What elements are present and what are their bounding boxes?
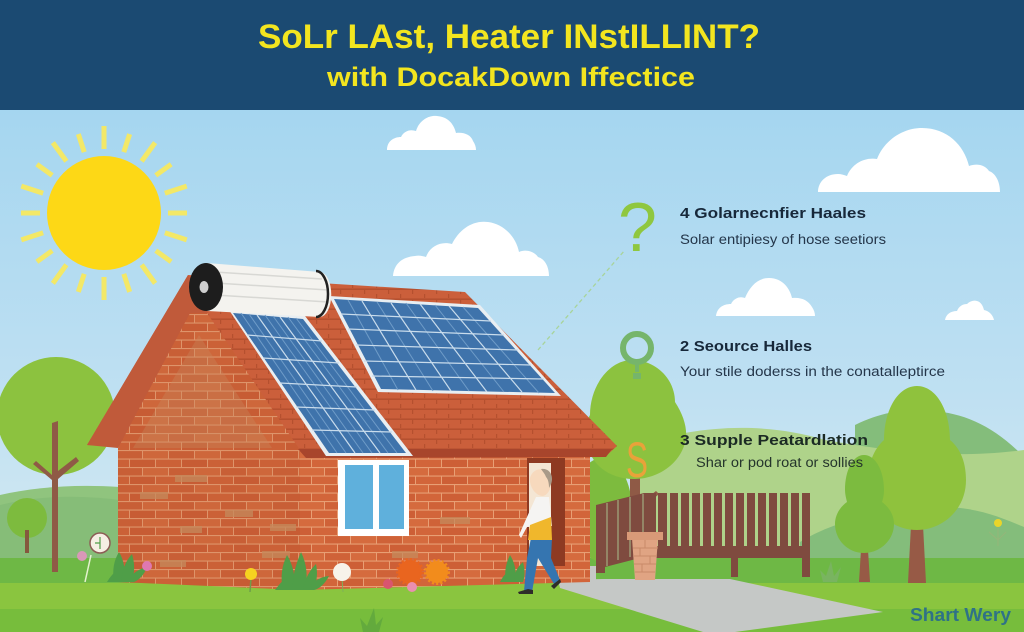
bush left (107, 552, 147, 582)
grass tuft right (820, 561, 841, 582)
flower amber (426, 561, 448, 583)
bush centre (275, 552, 329, 590)
flower far right (989, 519, 1006, 546)
icon: ring pin (623, 334, 651, 379)
tree: far left (7, 498, 47, 553)
brick wall (118, 313, 590, 590)
description: Shar or pod roat or sollies (696, 455, 863, 470)
legs (524, 538, 560, 592)
chimney pot planter (627, 532, 663, 580)
flower clock (77, 533, 110, 582)
description: Your stile doderss in the conatalleptirce (680, 364, 945, 379)
heading: 2 Seource Halles (680, 338, 812, 355)
flower orange (398, 560, 422, 584)
clouds (387, 116, 1000, 320)
header banner (0, 0, 1024, 110)
house (87, 263, 617, 590)
walkway (553, 566, 883, 632)
shirt (519, 497, 552, 538)
tree: centre behind text (572, 360, 686, 562)
solar water tank (189, 263, 331, 317)
tree: right large (868, 386, 966, 583)
main roof (87, 275, 617, 456)
person walking (518, 469, 561, 594)
door (527, 458, 565, 566)
left gable barge board (87, 275, 208, 448)
info item 3 (680, 432, 868, 470)
icon: sun (21, 126, 187, 300)
icon: dollar-like S: S (626, 432, 648, 488)
ground (0, 558, 1024, 632)
solar panel: right (329, 296, 561, 396)
hair (541, 469, 552, 488)
flower pink (142, 561, 417, 592)
brand label: Shart Wery (910, 605, 1011, 625)
heading: 3 Supple Peatardlation (680, 432, 868, 449)
flower yellow (245, 568, 257, 592)
roof eave (298, 449, 612, 458)
tree: left (0, 357, 115, 572)
dashed connector line (538, 250, 625, 350)
icon: question mark: ? (618, 188, 657, 266)
head (530, 469, 551, 496)
bush by door (500, 555, 524, 582)
info item 2 (680, 338, 945, 379)
grass tuft front (360, 608, 383, 632)
title: SoLr LAst, Heater INstILLINT? (258, 18, 760, 56)
tree: right small (835, 455, 894, 582)
shoes (518, 579, 561, 594)
apron (528, 517, 552, 540)
fence (596, 493, 810, 577)
bushes and flowers (77, 519, 1006, 632)
hills (0, 410, 1024, 567)
flower white (333, 563, 351, 592)
solar panel: left (229, 310, 413, 456)
info item 4 (680, 205, 886, 247)
heading: 4 Golarnecnfier Haales (680, 205, 866, 222)
subtitle: with DocakDown Iffectice (326, 62, 695, 92)
description: Solar entipiesy of hose seetiors (680, 232, 886, 247)
window (338, 460, 409, 536)
